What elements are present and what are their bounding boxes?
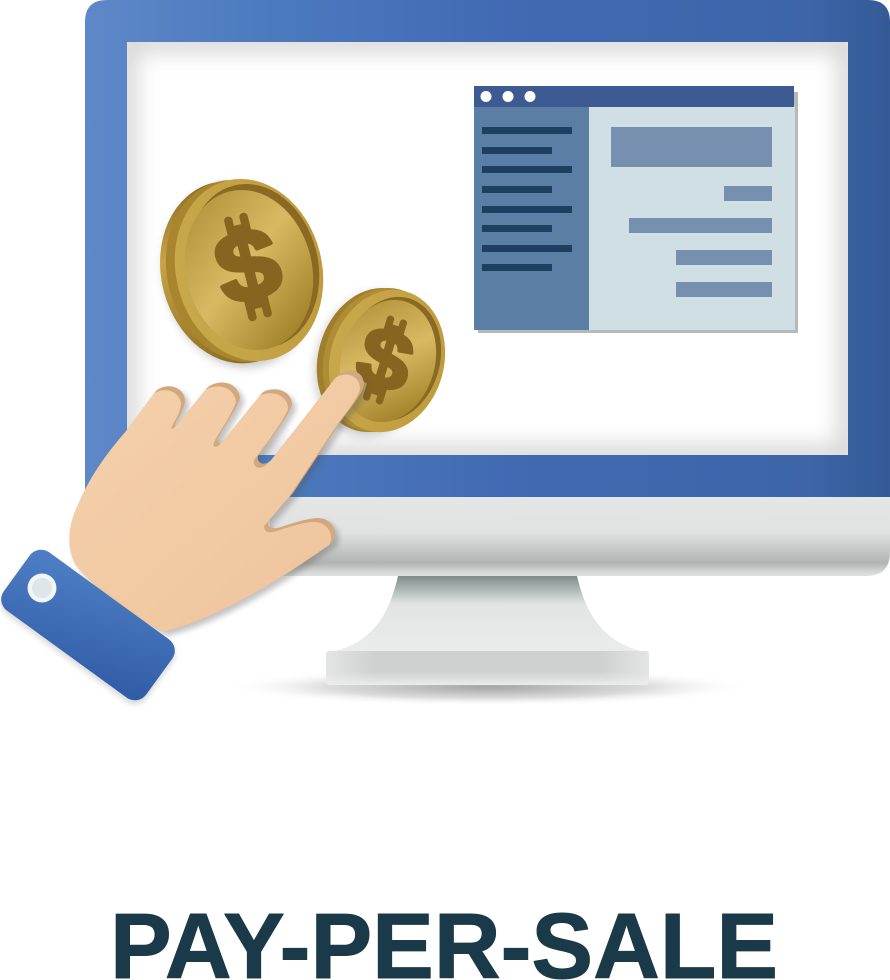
coin inner <box>327 289 449 433</box>
sidebar lines <box>482 127 572 271</box>
small coin <box>299 275 461 449</box>
monitor stand base <box>326 651 649 685</box>
hand shadow <box>73 375 368 636</box>
window shadow <box>478 92 798 333</box>
monitor stand shadow <box>223 668 753 706</box>
window sidebar <box>474 106 589 330</box>
screen inner shadow <box>127 42 848 455</box>
hand <box>0 371 368 710</box>
coin edge <box>141 164 333 379</box>
dollar sign: $ <box>204 205 291 328</box>
coin rim shadow <box>172 170 336 362</box>
coin shadow <box>145 169 331 383</box>
monitor frame <box>85 0 890 497</box>
monitor screen <box>127 42 848 455</box>
browser window <box>474 86 798 333</box>
sleeve cuff <box>0 544 180 706</box>
monitor stand neck <box>336 576 640 651</box>
coin edge <box>301 275 449 445</box>
coin face <box>313 277 461 445</box>
cuff button <box>28 574 56 602</box>
hand surface <box>65 375 360 636</box>
coin edge middle <box>307 275 455 445</box>
coin inner <box>168 176 330 364</box>
coin face <box>156 163 342 377</box>
window content pane <box>589 106 795 330</box>
coin rim shadow <box>329 286 455 432</box>
monitor chin <box>270 490 890 576</box>
window title bar <box>474 86 794 107</box>
monitor <box>85 0 890 706</box>
content bars <box>611 127 772 297</box>
window dots <box>480 91 536 102</box>
sleeve shadow <box>0 548 180 710</box>
dollar sign: $ <box>347 306 424 412</box>
large coin <box>141 163 342 383</box>
coin shadow <box>299 279 447 449</box>
hand edge <box>69 371 364 632</box>
